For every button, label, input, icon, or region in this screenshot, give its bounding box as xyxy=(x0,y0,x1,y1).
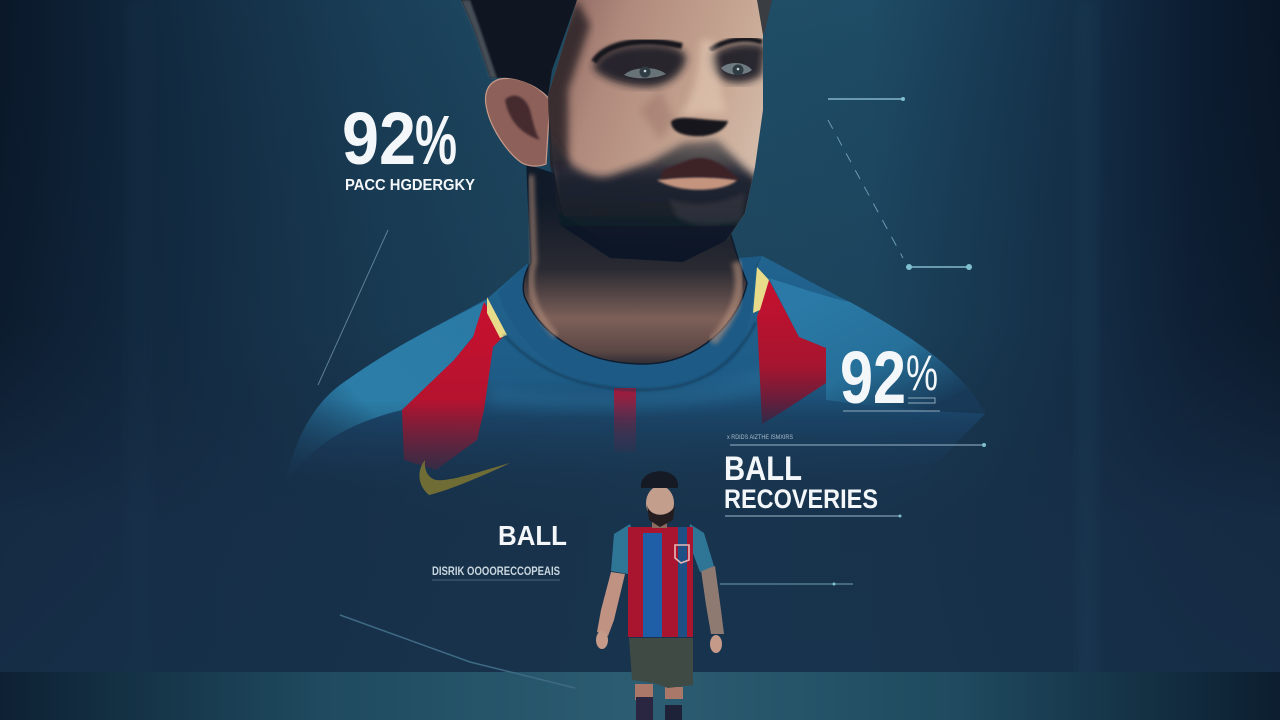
right arm xyxy=(701,566,724,634)
stat: 92% left xyxy=(342,97,475,194)
leader lines xyxy=(318,99,982,688)
sleeves xyxy=(611,524,635,574)
upper lip xyxy=(660,158,740,180)
left leg xyxy=(635,684,653,700)
icon: nike swoosh xyxy=(419,460,510,495)
left eye xyxy=(624,68,666,78)
collar xyxy=(498,256,762,386)
jersey xyxy=(628,527,693,637)
cheek shadow near nose xyxy=(642,93,674,137)
stat: 92% left: 92 xyxy=(342,97,416,180)
nose highlight xyxy=(680,40,726,116)
hair xyxy=(461,0,577,96)
beard xyxy=(551,135,754,262)
jersey chest band xyxy=(494,380,760,410)
jersey right shoulder highlight xyxy=(769,278,985,414)
underline marks xyxy=(843,398,940,411)
left collar trim xyxy=(487,297,507,338)
stat: 92% left: % xyxy=(415,101,457,179)
neck left light xyxy=(531,175,556,336)
neck xyxy=(652,512,667,528)
face xyxy=(548,0,763,252)
nose shadow xyxy=(671,118,728,136)
neck xyxy=(523,165,747,364)
jersey body xyxy=(302,256,985,456)
right eye socket xyxy=(710,43,766,83)
stat: 92% right: 92 xyxy=(840,336,906,419)
temple shadow xyxy=(540,0,590,170)
jersey left shoulder highlight xyxy=(302,300,487,450)
small full-length player xyxy=(596,471,724,720)
stat: 92% right: % xyxy=(906,345,938,401)
right leg xyxy=(665,687,683,699)
right sock xyxy=(665,705,682,720)
cap hair xyxy=(641,471,678,488)
ear xyxy=(486,78,550,166)
heading: ball recoveries: RECOVERIES xyxy=(724,484,878,514)
right eyebrow xyxy=(710,39,762,50)
chin stubble xyxy=(668,192,745,225)
left sock xyxy=(636,697,653,720)
right collar trim xyxy=(753,267,769,313)
shorts xyxy=(629,638,693,688)
right eye xyxy=(721,63,752,75)
right red panel xyxy=(757,280,826,424)
lower lip xyxy=(657,177,737,190)
floor xyxy=(0,672,1280,720)
stat label: PACC HGDERGKY xyxy=(345,177,475,194)
badge xyxy=(675,545,689,563)
left eye socket xyxy=(593,44,686,87)
centre red stripe xyxy=(614,388,636,452)
heading: ball recoveries xyxy=(724,450,878,514)
left red panel xyxy=(402,302,505,470)
left eyebrow xyxy=(594,42,682,62)
small descriptor text: DISRIK OOOORECCOPEAIS xyxy=(432,566,560,578)
heading: ball left: BALL xyxy=(498,520,567,551)
node dots xyxy=(832,97,986,586)
portrait: large player bust xyxy=(285,0,985,500)
left arm xyxy=(597,572,625,636)
face shading xyxy=(540,0,766,270)
jersey xyxy=(292,256,985,470)
heading: ball recoveries: BALL xyxy=(724,450,802,488)
small caption above ball recoveries: x RDIDS AIZTHE ISMXIRS xyxy=(727,434,794,441)
neck right light xyxy=(712,262,739,342)
face xyxy=(646,486,674,520)
